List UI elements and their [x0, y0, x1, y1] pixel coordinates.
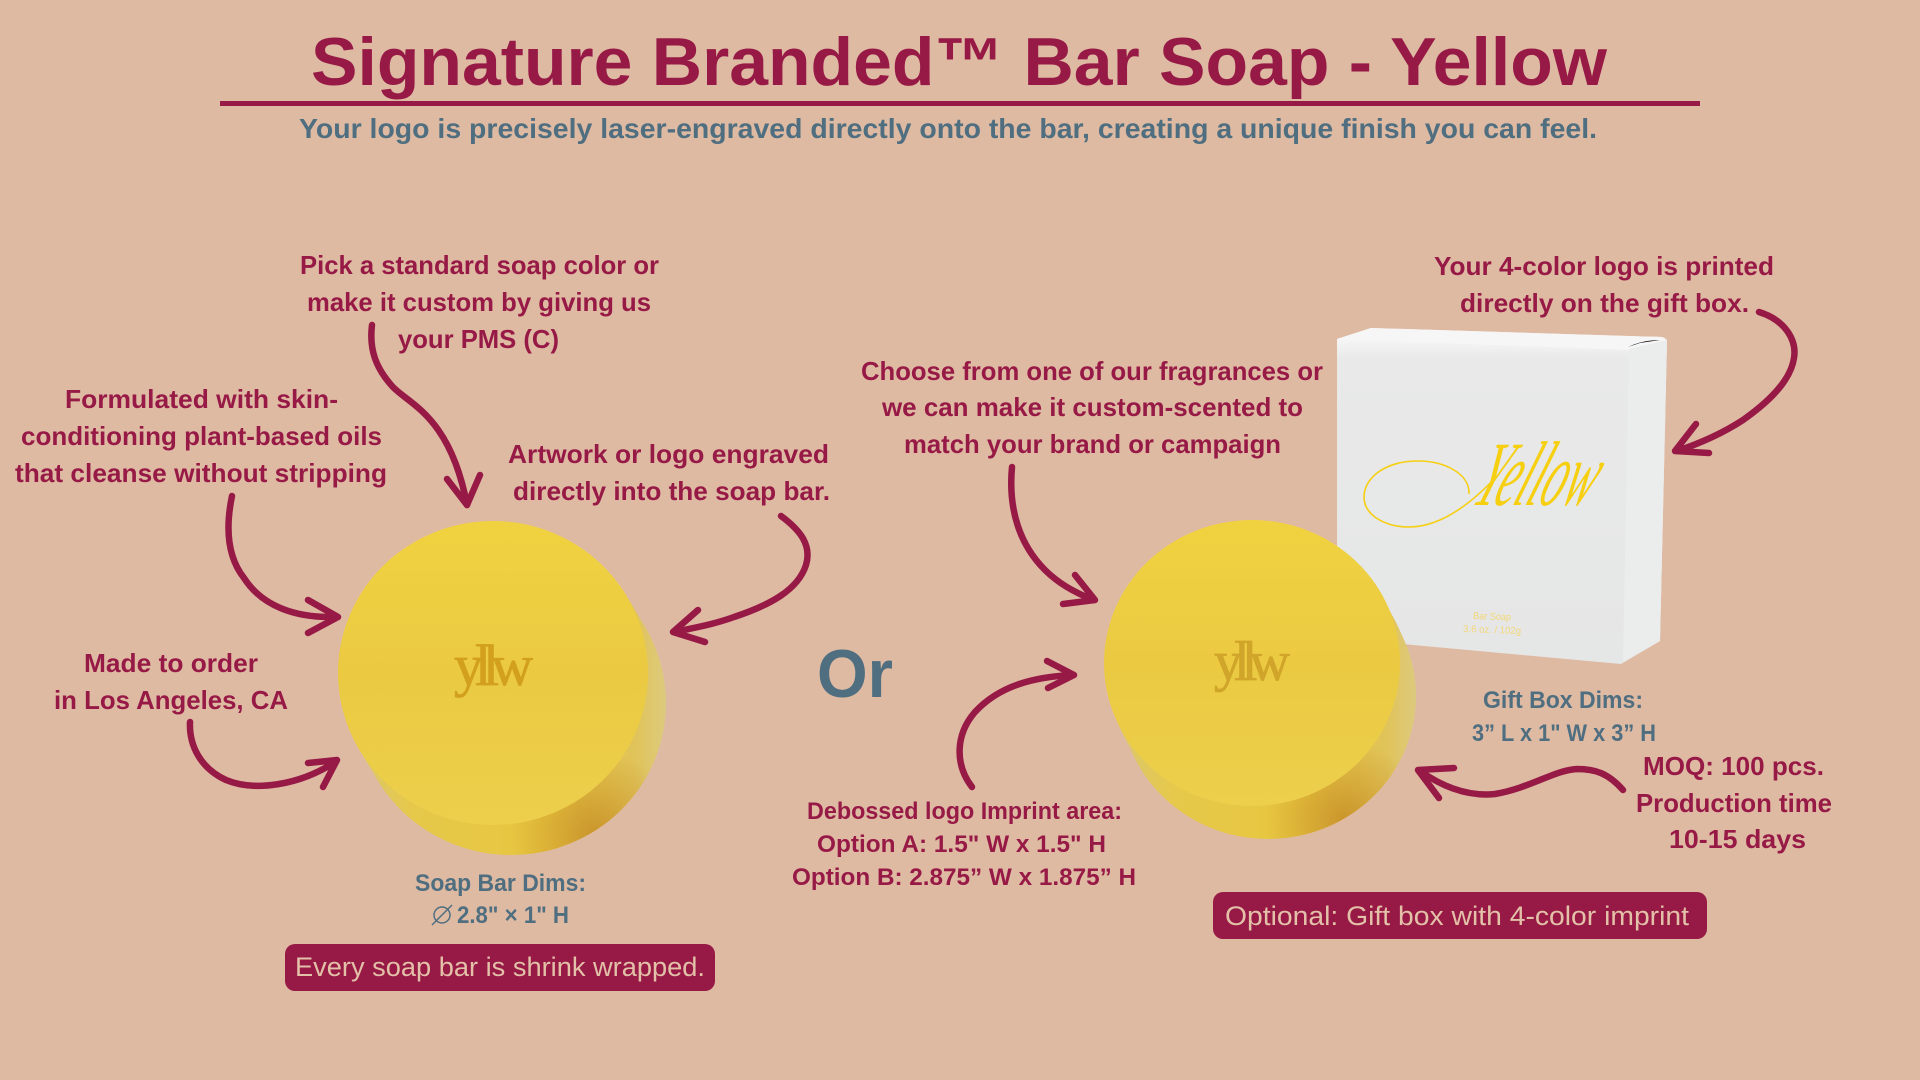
callout: artwork	[508, 439, 830, 506]
arrow: moq	[1418, 768, 1623, 798]
callout: soap color: Pick a standard soap color or	[300, 250, 659, 280]
pill: shrink wrapped: Every soap bar is shrink wrapped.	[295, 952, 705, 982]
gift box dimensions	[1472, 687, 1656, 747]
callout: made to order	[54, 648, 288, 715]
subtitle: Your logo is precisely laser-engraved directly onto the bar, creating a unique finish you can feel.	[299, 113, 1597, 144]
gift box dimensions: 3” L x 1" W x 3” H	[1472, 720, 1656, 747]
gift box	[1337, 328, 1667, 664]
callout: gift box print	[1434, 251, 1774, 318]
arrow: fragrance	[1011, 467, 1095, 604]
arrow: formulated	[228, 496, 338, 633]
callout: gift box print: directly on the gift box.	[1460, 288, 1749, 318]
arrow: artwork	[673, 516, 808, 642]
callout: formulated: Formulated with skin-	[65, 384, 338, 414]
title: Signature Branded™ Bar Soap - Yellow	[311, 24, 1608, 100]
gift box: Bar Soap	[1473, 611, 1512, 623]
callout: soap color: make it custom by giving us	[307, 287, 651, 317]
callout: imprint area: Debossed logo Imprint area:	[807, 798, 1122, 825]
callout: formulated: that cleanse without stripping	[15, 458, 387, 488]
callout: made to order: Made to order	[84, 648, 258, 678]
callout: formulated	[15, 384, 387, 488]
arrow: made to order	[190, 722, 337, 787]
callout: soap color	[300, 250, 659, 354]
pill: shrink wrapped	[285, 944, 715, 991]
pill: optional gift box	[1213, 892, 1707, 939]
soap bar right: yllw	[1214, 631, 1291, 693]
or: Or	[817, 636, 893, 712]
soap bar right	[1104, 520, 1416, 839]
callout: moq	[1636, 751, 1832, 854]
callout: fragrance	[861, 356, 1323, 459]
callout: soap color: your PMS (C)	[398, 324, 559, 354]
arrow: imprint area	[960, 661, 1074, 787]
soap bar left: yllw	[454, 633, 533, 698]
title underline	[220, 101, 1700, 106]
callout: moq: 10-15 days	[1669, 824, 1806, 854]
arrow: soap color	[371, 325, 480, 505]
gift box: 3.6 oz. / 102g	[1463, 624, 1521, 637]
callout: imprint area: Option B: 2.875” W x 1.875” H	[792, 864, 1136, 891]
gift box: Yellow	[1462, 423, 1621, 525]
callout: moq: MOQ: 100 pcs.	[1643, 751, 1824, 781]
callout: fragrance: match your brand or campaign	[904, 429, 1281, 459]
callout: artwork: Artwork or logo engraved	[508, 439, 829, 469]
callout: fragrance: we can make it custom-scented to	[881, 392, 1303, 422]
callout: gift box print: Your 4-color logo is printed	[1434, 251, 1774, 281]
callout: fragrance: Choose from one of our fragrances or	[861, 356, 1323, 386]
arrow: gift box print	[1675, 312, 1794, 453]
soap dimensions: Soap Bar Dims:	[415, 870, 586, 897]
callout: moq: Production time	[1636, 788, 1832, 818]
callout: artwork: directly into the soap bar.	[513, 476, 830, 506]
callout: imprint area: Option A: 1.5" W x 1.5" H	[817, 831, 1106, 858]
callout: formulated: conditioning plant-based oils	[21, 421, 382, 451]
soap bar left	[338, 521, 666, 855]
callout: made to order: in Los Angeles, CA	[54, 685, 288, 715]
gift box dimensions: Gift Box Dims:	[1483, 687, 1643, 714]
callout: imprint area	[792, 798, 1136, 891]
pill: optional gift box: Optional: Gift box with 4-color imprint	[1225, 901, 1690, 931]
soap dimensions: 2.8" × 1" H	[457, 902, 569, 929]
soap dimensions	[415, 870, 586, 929]
